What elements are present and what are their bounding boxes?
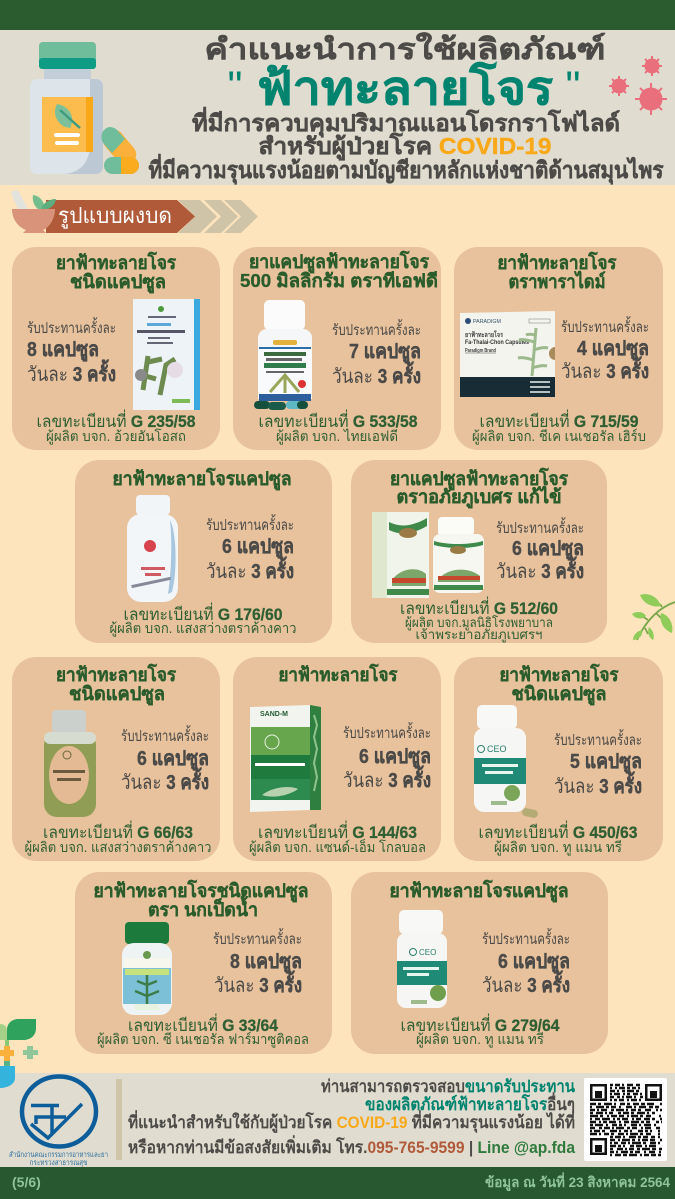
panel: product 9: รับประทานครั้งละ [213, 928, 302, 948]
panel: product 1: เลขทะเบียนที่ G 235/58 [36, 409, 196, 431]
panel: product 5: ตราอภัยภูเบศร แก้ไข้ [396, 485, 562, 509]
icon: capsules [99, 125, 141, 174]
panel: product 5: เลขทะเบียนที่ G 512/60 [400, 596, 558, 618]
panel: product 9: วันละ 3 ครั้ง [214, 970, 302, 997]
panel: product 6 [12, 657, 220, 861]
panel: product 1: วันละ 3 ครั้ง [27, 359, 116, 386]
logo: FDA [9, 1076, 108, 1167]
panel: product 4: วันละ 3 ครั้ง [206, 556, 294, 583]
product bottle: CEO [419, 948, 436, 957]
product bottle [127, 495, 178, 602]
panel: product 8: รับประทานครั้งละ [554, 729, 642, 749]
panel: product 9: ตรา นกเป็ดน้ำ [148, 896, 258, 920]
panel: product 7: 6 แคปซูล [359, 746, 431, 770]
bottom band: ข้อมูล ณ วันที่ 23 สิงหาคม 2564 [485, 1172, 670, 1191]
panel: product 3: วันละ 3 ครั้ง [561, 356, 649, 383]
bottom band: (5/6) [12, 1174, 41, 1190]
panel: product 3 [454, 247, 663, 450]
panel: product 6: เลขทะเบียนที่ G 66/63 [43, 820, 193, 842]
title: " [228, 62, 242, 109]
panel: product 10: วันละ 3 ครั้ง [482, 970, 570, 997]
panel: product 8: ผู้ผลิต บจก. ทู แมน ทรี [494, 839, 622, 856]
product bottle [254, 300, 312, 410]
footer note: ที่แนะนำสำหรับใช้กับผู้ป่วยโรค COVID-19 ที่มีความรุนแรงน้อย ได้ที่ [128, 1110, 575, 1134]
product bottle [122, 922, 172, 1015]
panel: product 7: ผู้ผลิต บจก. แซนด์-เอ็ม โกลบอล [249, 838, 426, 856]
panel: product 5: ยาแคปซูลฟ้าทะลายโจร [390, 467, 568, 491]
footer note [128, 1077, 575, 1157]
top band [0, 0, 675, 30]
panel: product 3: 4 แคปซูล [577, 338, 649, 362]
panel: product 6: 6 แคปซูล [137, 748, 209, 772]
footer note: หรือหากท่านมีข้อสงสัยเพิ่มเติม โทร.095-765-9599 | Line @ap.fda [128, 1135, 575, 1157]
title [148, 32, 664, 185]
footer note: ท่านสามารถตรวจสอบขนาดรับประทาน [321, 1077, 575, 1096]
panel: product 1: รับประทานครั้งละ [27, 317, 116, 337]
panel: product 5: ผู้ผลิต บจก.มูลนิธิโรงพยาบาล [405, 615, 553, 631]
panel: product 1: 8 แคปซูล [27, 339, 99, 363]
panel: product 1: ผู้ผลิต บจก. อ้วยอันโอสถ [46, 428, 186, 445]
title: ที่มีการควบคุมปริมาณแอนโดรกราโฟไลด์ [192, 106, 620, 138]
footer panel [0, 1073, 675, 1167]
panel: product 9 [75, 872, 332, 1054]
title: ฟ้าทะลายโจร [257, 61, 553, 114]
panel: product 6: รับประทานครั้งละ [121, 725, 209, 745]
product box: PARADIGM [473, 319, 501, 325]
panel: product 8: ยาฟ้าทะลายโจร [500, 663, 619, 685]
panel: product 3: ผู้ผลิต บจก. ชีเค เนเชอรัล เฮิร์บ [472, 428, 646, 445]
panel: product 4 [75, 460, 332, 643]
panel: product 8: วันละ 3 ครั้ง [554, 771, 642, 798]
panel: product 10: รับประทานครั้งละ [482, 928, 570, 948]
panel: product 7 [233, 657, 441, 861]
panel: product 2: 500 มิลลิกรัม ตราทีเอฟดี [240, 270, 438, 291]
panel: product 9: 8 แคปซูล [230, 951, 302, 975]
panel: product 2: รับประทานครั้งละ [332, 319, 421, 339]
title: คำแนะนำการใช้ผลิตภัณฑ์ [204, 32, 606, 66]
panel: product 10: เลขทะเบียนที่ G 279/64 [400, 1013, 560, 1035]
logo: FDA: กระทรวงสาธารณสุข [30, 1158, 88, 1167]
panel: product 10: ยาฟ้าทะลายโจรแคปซูล [390, 879, 568, 903]
panel: product 10: ผู้ผลิต บจก. ทู แมน ทรี [416, 1031, 544, 1048]
panel: product 4: รับประทานครั้งละ [206, 514, 294, 534]
product box [460, 311, 555, 397]
panel: product 6: ชนิดแคปซูล [69, 683, 165, 706]
panel: product 6: ยาฟ้าทะลายโจร [56, 663, 176, 685]
product box [133, 299, 200, 410]
product box [250, 705, 321, 812]
panel: product 7: ยาฟ้าทะลายโจร [278, 663, 398, 685]
panel: product 10: 6 แคปซูล [498, 951, 570, 975]
panel: product 2: ยาแคปซูลฟ้าทะลายโจร [249, 250, 429, 274]
panel: product 9: เลขทะเบียนที่ G 33/64 [128, 1013, 278, 1035]
panel: product 7: วันละ 3 ครั้ง [343, 765, 431, 792]
icon: herb capsule [0, 1019, 38, 1088]
panel: product 2: ผู้ผลิต บจก. ไทยเอฟดี [276, 428, 398, 445]
panel: product 8: เลขทะเบียนที่ G 450/63 [478, 820, 638, 842]
panel: product 1: ชนิดแคปซูล [70, 271, 166, 294]
panel: product 3: เลขทะเบียนที่ G 715/59 [480, 409, 638, 431]
panel: product 8 [454, 657, 663, 861]
panel: product 4: 6 แคปซูล [222, 536, 294, 560]
title: " [566, 62, 580, 109]
panel: product 5: รับประทานครั้งละ [496, 517, 584, 537]
panel: product 9: ผู้ผลิต บจก. ซี เนเชอรัล ฟาร์มาซูติคอล [97, 1031, 309, 1048]
icon: medicine bottle [30, 42, 103, 174]
product box: Fa-Thalai-Chon Capsules [465, 339, 529, 346]
product bottle [397, 910, 447, 1008]
panel: product 3: รับประทานครั้งละ [561, 316, 649, 336]
panel: product 2: วันละ 3 ครั้ง [332, 361, 421, 388]
panel: product 2: 7 แคปซูล [349, 341, 421, 365]
product box: Paradigm Brand [465, 348, 496, 354]
icon: viruses [609, 56, 667, 115]
header panel [0, 30, 675, 185]
product box and bottle [372, 512, 484, 598]
product bottle [44, 710, 96, 817]
panel: product 7: เลขทะเบียนที่ G 144/63 [258, 820, 417, 842]
icon: leaf branch [632, 594, 675, 640]
logo: FDA: สำนักงานคณะกรรมการอาหารและยา [9, 1150, 108, 1159]
panel: product 5: เจ้าพระยาอภัยภูเบศรฯ [416, 627, 542, 643]
section tag [11, 190, 258, 233]
panel: product 7: รับประทานครั้งละ [343, 722, 431, 742]
bottom band [0, 1167, 675, 1199]
title: สำหรับผู้ป่วยโรค COVID-19 [258, 132, 552, 161]
panel: product 6: วันละ 3 ครั้ง [121, 767, 209, 794]
panel: product 5: วันละ 3 ครั้ง [496, 556, 584, 583]
panel: product 5 [351, 460, 607, 643]
panel: product 2: เลขทะเบียนที่ G 533/58 [258, 409, 418, 431]
panel: product 1: ยาฟ้าทะลายโจร [56, 251, 176, 273]
product box: ยาฟ้าทะลายโจร [465, 330, 503, 339]
QR code [584, 1078, 667, 1161]
panel: product 1 [12, 247, 220, 450]
panel: product 5: 6 แคปซูล [512, 538, 584, 562]
panel: product 4: เลขทะเบียนที่ G 176/60 [124, 602, 282, 624]
product bottle: CEO [487, 744, 507, 754]
icon: mortar [11, 190, 56, 233]
product box: SAND-M [260, 711, 288, 718]
panel: product 8: ชนิดแคปซูล [512, 683, 606, 706]
panel: product 3: ตราพาราไดม์ [508, 270, 606, 292]
panel: product 8: 5 แคปซูล [570, 751, 642, 775]
panel: product 6: ผู้ผลิต บจก. แสงสว่างตราค้างคาว [24, 839, 212, 856]
footer note: ของผลิตภัณฑ์ฟ้าทะลายโจรอื่นๆ [365, 1092, 575, 1114]
panel: product 4: ผู้ผลิต บจก. แสงสว่างตราค้างคาว [110, 620, 296, 637]
panel: product 3: ยาฟ้าทะลายโจร [498, 251, 617, 273]
product bottle [474, 705, 539, 819]
panel: product 9: ยาฟ้าทะลายโจรชนิดแคปซูล [94, 879, 308, 903]
section tag: รูปแบบผงบด [58, 203, 172, 229]
panel: product 2 [233, 247, 441, 450]
panel: product 10 [351, 872, 608, 1054]
panel: product 4: ยาฟ้าทะลายโจรแคปซูล [112, 467, 292, 491]
